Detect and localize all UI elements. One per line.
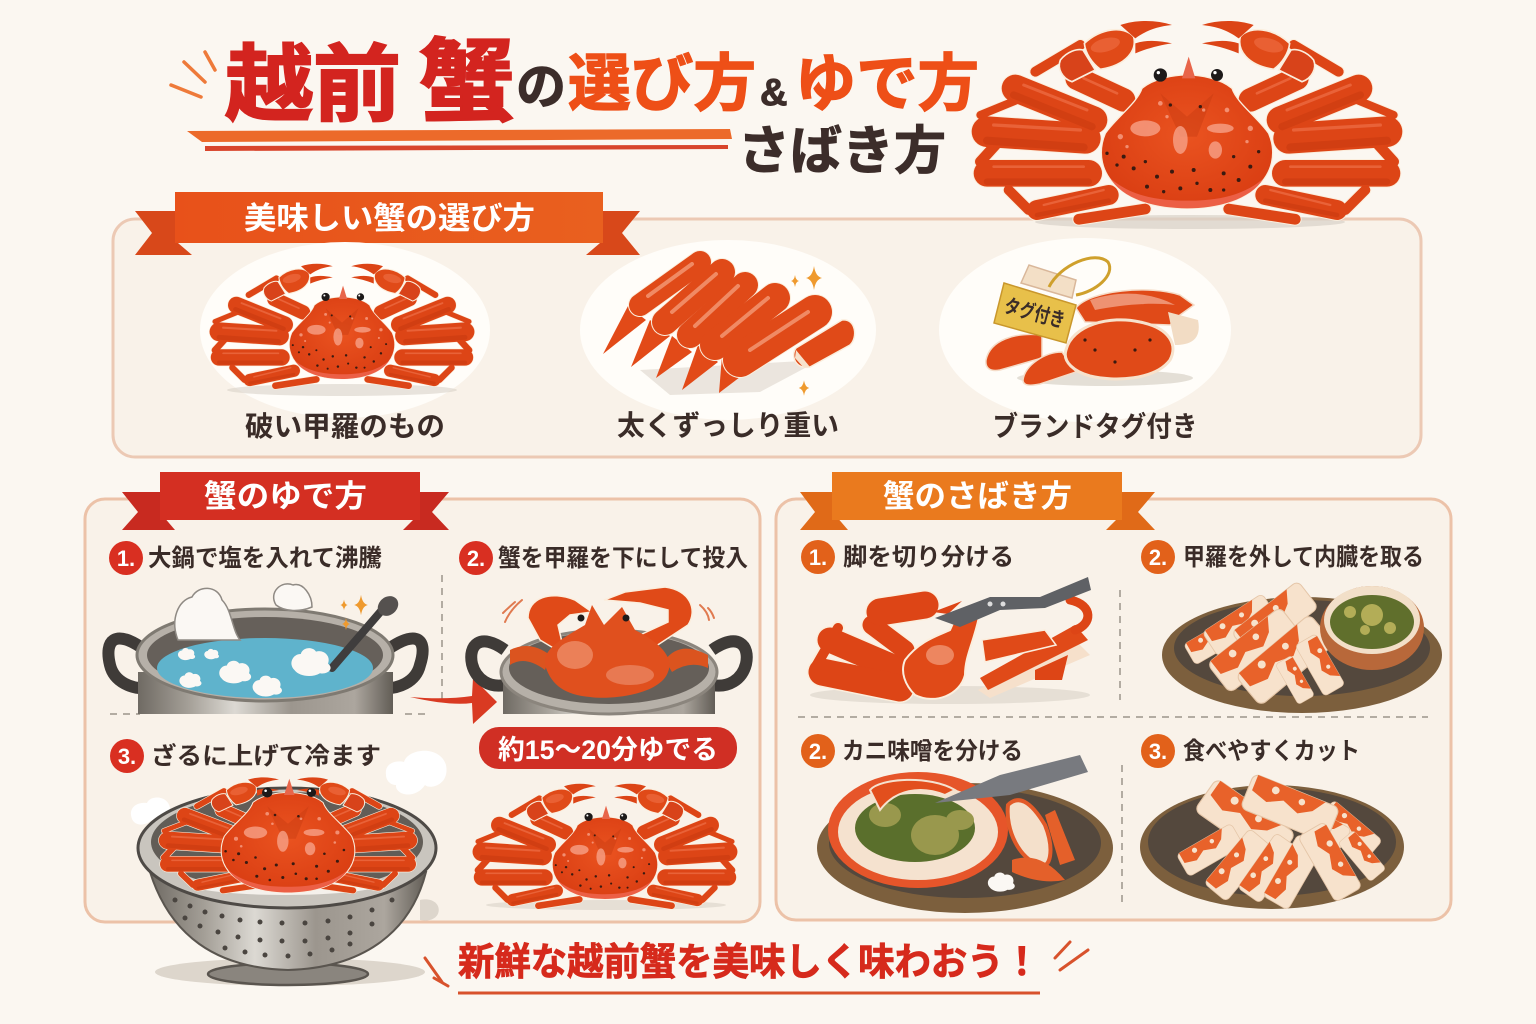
illustration: shell with crab miso and knife bbox=[817, 755, 1113, 913]
panel: how to choose bbox=[113, 219, 1421, 457]
title: さばき方: さばき方 bbox=[738, 123, 946, 181]
item: brand tag: タグ付き bbox=[1002, 293, 1068, 333]
step 1 boil: label: 1. bbox=[117, 546, 135, 571]
title bbox=[171, 33, 979, 181]
illustration: plate with crab meat and shell bbox=[1162, 581, 1442, 713]
title: の: の bbox=[516, 59, 566, 115]
colander with crab bbox=[131, 751, 447, 986]
illustration: plate with cut crab pieces bbox=[1140, 773, 1404, 910]
step 2 fillet: label bbox=[1141, 540, 1424, 574]
ribbon: choosing heading bbox=[135, 192, 640, 255]
step 1 boil: label bbox=[109, 541, 382, 575]
step 1 fillet: label: 1. bbox=[809, 545, 827, 570]
ribbon: fillet heading bbox=[800, 472, 1155, 530]
title: 越前蟹: 越前 bbox=[225, 38, 401, 132]
title: 選び方: 選び方 bbox=[568, 50, 756, 119]
step 2 boil: label: 蟹を甲羅を下にして投入 bbox=[498, 545, 748, 572]
boiled crab bbox=[478, 784, 732, 910]
step 2 fillet: label: 2. bbox=[1149, 545, 1167, 570]
ribbon: choosing heading: 美味しい蟹の選び方 bbox=[244, 201, 535, 236]
panel: how to fillet bbox=[776, 499, 1451, 920]
hero crab bbox=[980, 21, 1394, 229]
ribbon: boil heading: 蟹のゆで方 bbox=[204, 479, 367, 514]
illustration: cut crab legs with scissors bbox=[810, 577, 1091, 704]
step 2b fillet: label: 2. bbox=[809, 739, 827, 764]
item: hard shell: 破い甲羅のもの bbox=[245, 411, 445, 442]
item: hard shell bbox=[200, 242, 490, 442]
step 2 fillet: label: 甲羅を外して内臓を取る bbox=[1183, 544, 1424, 571]
step 2b fillet: label: カニ味噌を分ける bbox=[842, 738, 1023, 765]
step 3 fillet: label: 食べやすくカット bbox=[1183, 738, 1360, 765]
item: thick heavy legs bbox=[580, 240, 876, 441]
step 3 boil: label: ざるに上げて冷ます bbox=[151, 742, 381, 770]
title: ゆで方: ゆで方 bbox=[795, 50, 979, 119]
item: brand tag bbox=[939, 238, 1231, 442]
pot with salted water bbox=[108, 584, 423, 714]
panel: how to boil bbox=[85, 499, 760, 922]
arrow bbox=[410, 678, 497, 724]
step 2b fillet: label bbox=[801, 734, 1023, 768]
step 1 fillet: label: 脚を切り分ける bbox=[843, 544, 1014, 571]
timer pill: 約15〜20分ゆでる bbox=[498, 735, 718, 765]
title sparks bbox=[171, 52, 215, 97]
title underline bbox=[187, 129, 732, 151]
step 3 boil: label bbox=[110, 739, 381, 773]
step 2 boil: label: 2. bbox=[467, 546, 485, 571]
step 3 fillet: label: 3. bbox=[1149, 739, 1167, 764]
timer pill bbox=[479, 727, 737, 769]
closing message: 新鮮な越前蟹を美味しく味わおう！ bbox=[458, 942, 1040, 984]
title: 越前蟹: 蟹 bbox=[419, 33, 515, 133]
step 3 boil: label: 3. bbox=[118, 744, 136, 769]
step 1 boil: label: 大鍋で塩を入れて沸騰 bbox=[148, 545, 382, 572]
title: &: & bbox=[760, 72, 787, 114]
step 1 fillet: label bbox=[801, 540, 1014, 574]
item: brand tag: ブランドタグ付き bbox=[992, 410, 1198, 442]
pot with crab bbox=[471, 587, 747, 714]
ribbon: fillet heading: 蟹のさばき方 bbox=[883, 479, 1072, 514]
item: thick heavy legs: 太くずっしり重い bbox=[617, 410, 839, 441]
ribbon: boil heading bbox=[122, 472, 449, 530]
title: 越前蟹 bbox=[225, 33, 515, 133]
step 2 boil: label bbox=[459, 541, 748, 575]
step 3 fillet: label bbox=[1141, 734, 1360, 768]
